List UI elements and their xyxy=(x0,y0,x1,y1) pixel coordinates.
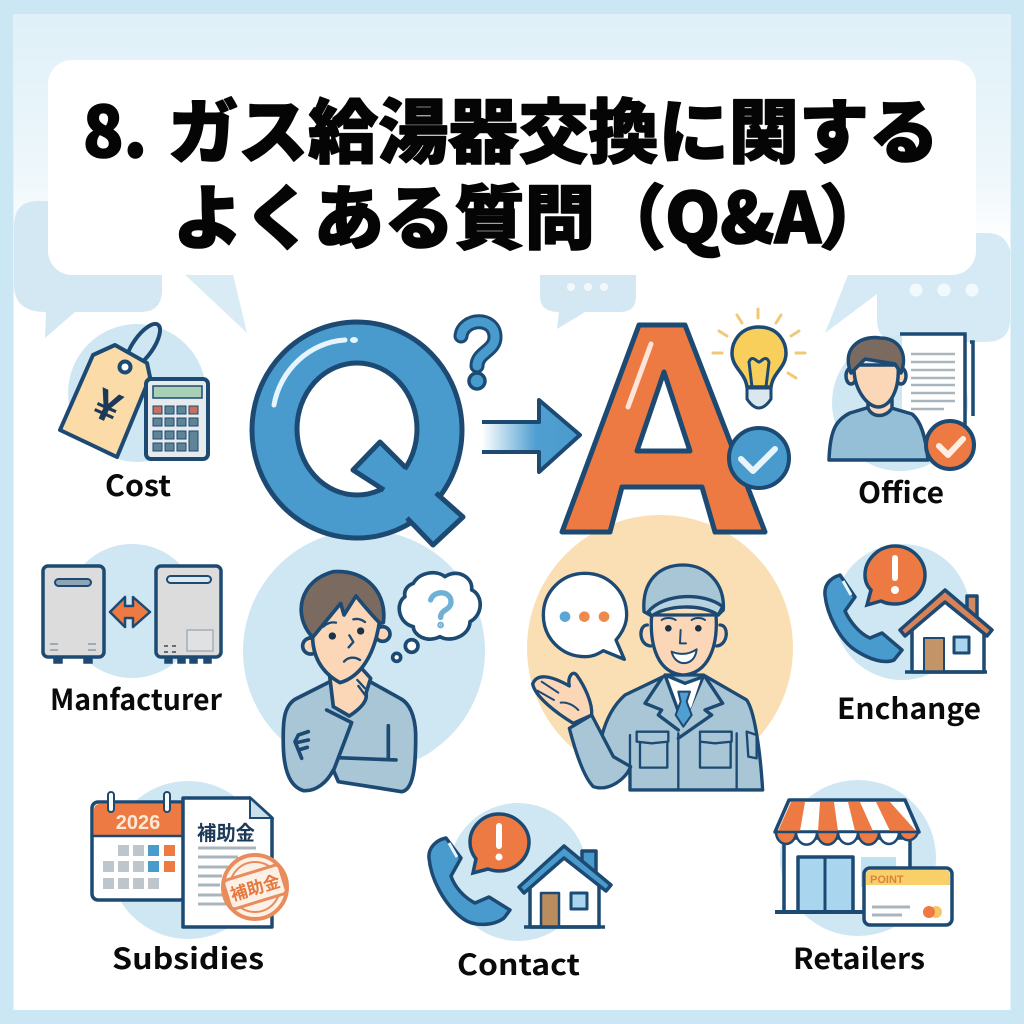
icon: right water heater xyxy=(156,566,221,663)
man eyes xyxy=(329,627,364,640)
man background circle xyxy=(243,530,485,772)
label: Office: Office xyxy=(858,470,944,512)
icon: orange check badge xyxy=(926,421,974,469)
worker face xyxy=(651,615,716,675)
icon: exchange arrow xyxy=(110,597,150,627)
icon: calculator xyxy=(146,379,208,459)
icon: house xyxy=(519,846,611,927)
worker background circle xyxy=(527,515,793,781)
worker illustration xyxy=(533,565,763,790)
manufacturer background circle xyxy=(65,544,199,678)
label: Enchange: Enchange xyxy=(837,686,981,728)
worker hand xyxy=(533,673,592,723)
panel: manufacturer xyxy=(43,544,222,719)
icon: telephone xyxy=(825,575,902,662)
contact background circle xyxy=(449,803,587,941)
worker sleeve xyxy=(569,715,631,788)
speech bubble xyxy=(543,573,627,659)
small thought bubble xyxy=(393,653,401,661)
thought cloud xyxy=(399,573,480,639)
panel: subsidies xyxy=(92,781,287,978)
icon: subsidy stamp: 補助金 xyxy=(227,867,283,906)
letter A xyxy=(562,325,765,532)
icon: calendar xyxy=(92,792,186,900)
cost background circle xyxy=(68,324,206,462)
panel: contact xyxy=(429,803,611,984)
title line 2 xyxy=(173,163,889,264)
worker pockets xyxy=(630,732,757,790)
pale header wash xyxy=(14,14,1010,244)
icon: light bulb xyxy=(713,309,805,408)
decorative speech bubbles xyxy=(14,201,1010,342)
panel: retailers xyxy=(775,780,952,978)
worker cap xyxy=(644,565,723,616)
man right ear xyxy=(375,627,390,641)
title panel xyxy=(48,60,976,275)
icon: document xyxy=(900,334,973,435)
thinking man illustration xyxy=(283,572,480,792)
man hair xyxy=(301,572,384,637)
icon: alert bubble xyxy=(470,814,529,873)
icon: calendar: 2026 xyxy=(116,812,160,834)
worker palm lines xyxy=(537,682,578,710)
label: Cost: Cost xyxy=(105,463,171,505)
subsidies background circle xyxy=(109,781,267,939)
icon: telephone xyxy=(429,838,510,924)
title line 1: ガス給湯器交換に関する xyxy=(168,77,939,178)
icon: subsidy stamp xyxy=(223,855,287,919)
label: Retailers: Retailers xyxy=(793,936,925,978)
worker visor xyxy=(648,597,723,616)
icon: subsidy document xyxy=(183,798,272,927)
icon: price tag: ¥ xyxy=(86,379,129,434)
panel: office xyxy=(829,334,974,512)
label: Subsidies: Subsidies xyxy=(112,936,264,978)
thought bubbles xyxy=(405,640,418,652)
icon: subsidy document: 補助金 xyxy=(197,817,255,846)
panel: enchange xyxy=(825,544,992,728)
icon: house xyxy=(900,590,992,672)
question mark near Q xyxy=(461,322,495,389)
worker collar xyxy=(665,675,703,725)
thought question mark xyxy=(431,593,451,626)
icon: point card: POINT xyxy=(870,874,904,886)
worker lapels xyxy=(645,677,723,738)
title line 2: ） xyxy=(819,163,889,264)
panel: cost xyxy=(60,319,208,505)
retailers background circle xyxy=(780,780,936,936)
man face xyxy=(312,593,380,683)
icon: office person xyxy=(829,337,928,460)
office background circle xyxy=(832,335,968,471)
icon: shop xyxy=(775,800,919,912)
worker jacket xyxy=(602,675,763,790)
man expression xyxy=(323,619,365,695)
man arm details xyxy=(295,710,396,769)
label: Contact: Contact xyxy=(457,942,580,984)
title line 2: （ xyxy=(596,163,666,264)
icon: left water heater xyxy=(43,566,104,663)
icon: blue check badge xyxy=(729,428,789,488)
title line 2: Q&A xyxy=(665,163,822,264)
label: Manfacturer: Manfacturer xyxy=(50,677,222,719)
worker ears xyxy=(641,625,726,646)
arrow from Q to A xyxy=(482,400,580,472)
man body xyxy=(283,682,416,792)
icon: point card xyxy=(864,868,952,925)
enchange background circle xyxy=(834,544,970,680)
title line 2: よくある質問 xyxy=(173,163,595,264)
worker eyes xyxy=(665,625,702,632)
letter Q xyxy=(252,322,463,545)
icon: price tag xyxy=(60,319,166,457)
man ears xyxy=(303,638,319,654)
worker brows and nose xyxy=(662,618,705,643)
worker tie xyxy=(676,692,692,727)
title line 1: 8. xyxy=(83,77,147,178)
icon: alert bubble xyxy=(865,546,925,605)
man hand and neck xyxy=(329,667,371,716)
speech dots xyxy=(560,611,609,622)
worker smile xyxy=(672,649,697,663)
